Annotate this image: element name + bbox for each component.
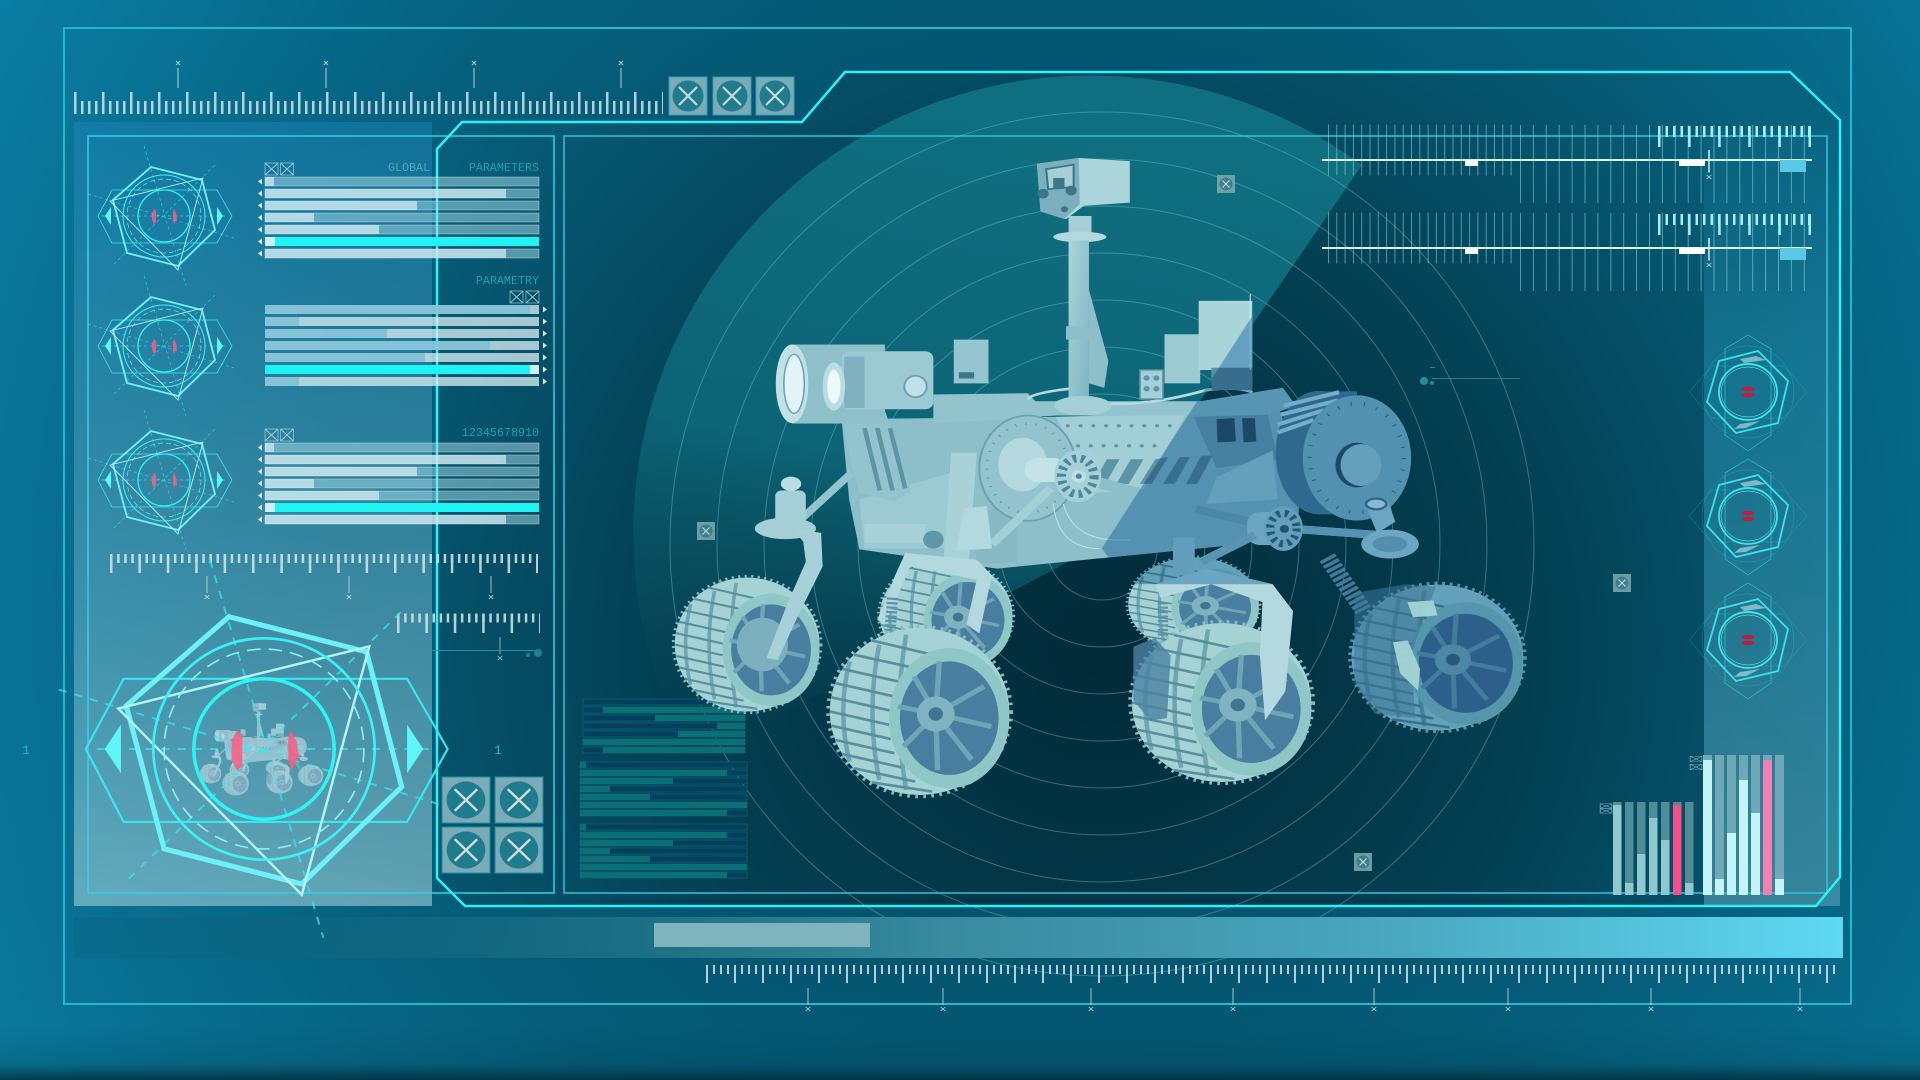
bottom ruler pins [806, 988, 1802, 1011]
heading: parametry: PARAMETRY [476, 274, 539, 288]
big target scanner [59, 560, 453, 938]
ruler pins [205, 576, 493, 599]
bar group 3 [258, 443, 539, 524]
small ruler [397, 618, 542, 660]
heading: global: GLOBAL [388, 161, 430, 175]
left ruler [110, 558, 538, 564]
bar group 2 [265, 305, 547, 386]
icon: hex target 3 [88, 410, 234, 550]
2x2 X buttons [442, 777, 543, 873]
icon: hex target 2 [88, 276, 234, 416]
main bright octagon outline [437, 72, 1840, 906]
panel: main dark display [437, 72, 1840, 906]
bottom ruler [706, 970, 1840, 974]
bar group 1 [258, 177, 539, 258]
radar sweep disc [633, 75, 1362, 760]
labels: left 1: 1 [22, 743, 30, 758]
bar chart: small [1600, 802, 1694, 895]
faint slider widget [1420, 367, 1520, 385]
heading: parameters: PARAMETERS [469, 161, 539, 175]
floating X markers [697, 175, 1631, 871]
panel outlines [88, 136, 1827, 893]
ghost data table [580, 699, 747, 878]
small x boxes [265, 163, 539, 441]
panel: left translucent overlay [74, 122, 432, 906]
bottom gradient bar [74, 917, 1843, 958]
icon: hex target 1 [88, 146, 234, 286]
bar handle [654, 923, 870, 947]
top X buttons [669, 77, 794, 115]
icon: right target 3 [1689, 583, 1807, 699]
radar rings [670, 112, 1534, 976]
barcode readout 2 [1322, 220, 1812, 267]
panel: right translucent overlay [1704, 130, 1840, 906]
top ruler [74, 61, 663, 108]
bar chart: large [1690, 755, 1784, 895]
barcode readout 1 [1322, 132, 1812, 179]
rover [673, 158, 1525, 797]
icon: right target 2 [1689, 459, 1807, 575]
icon: right target 1 [1689, 335, 1807, 451]
heading: numbers: 12345678910 [462, 426, 539, 440]
labels: right 1: 1 [494, 743, 502, 758]
